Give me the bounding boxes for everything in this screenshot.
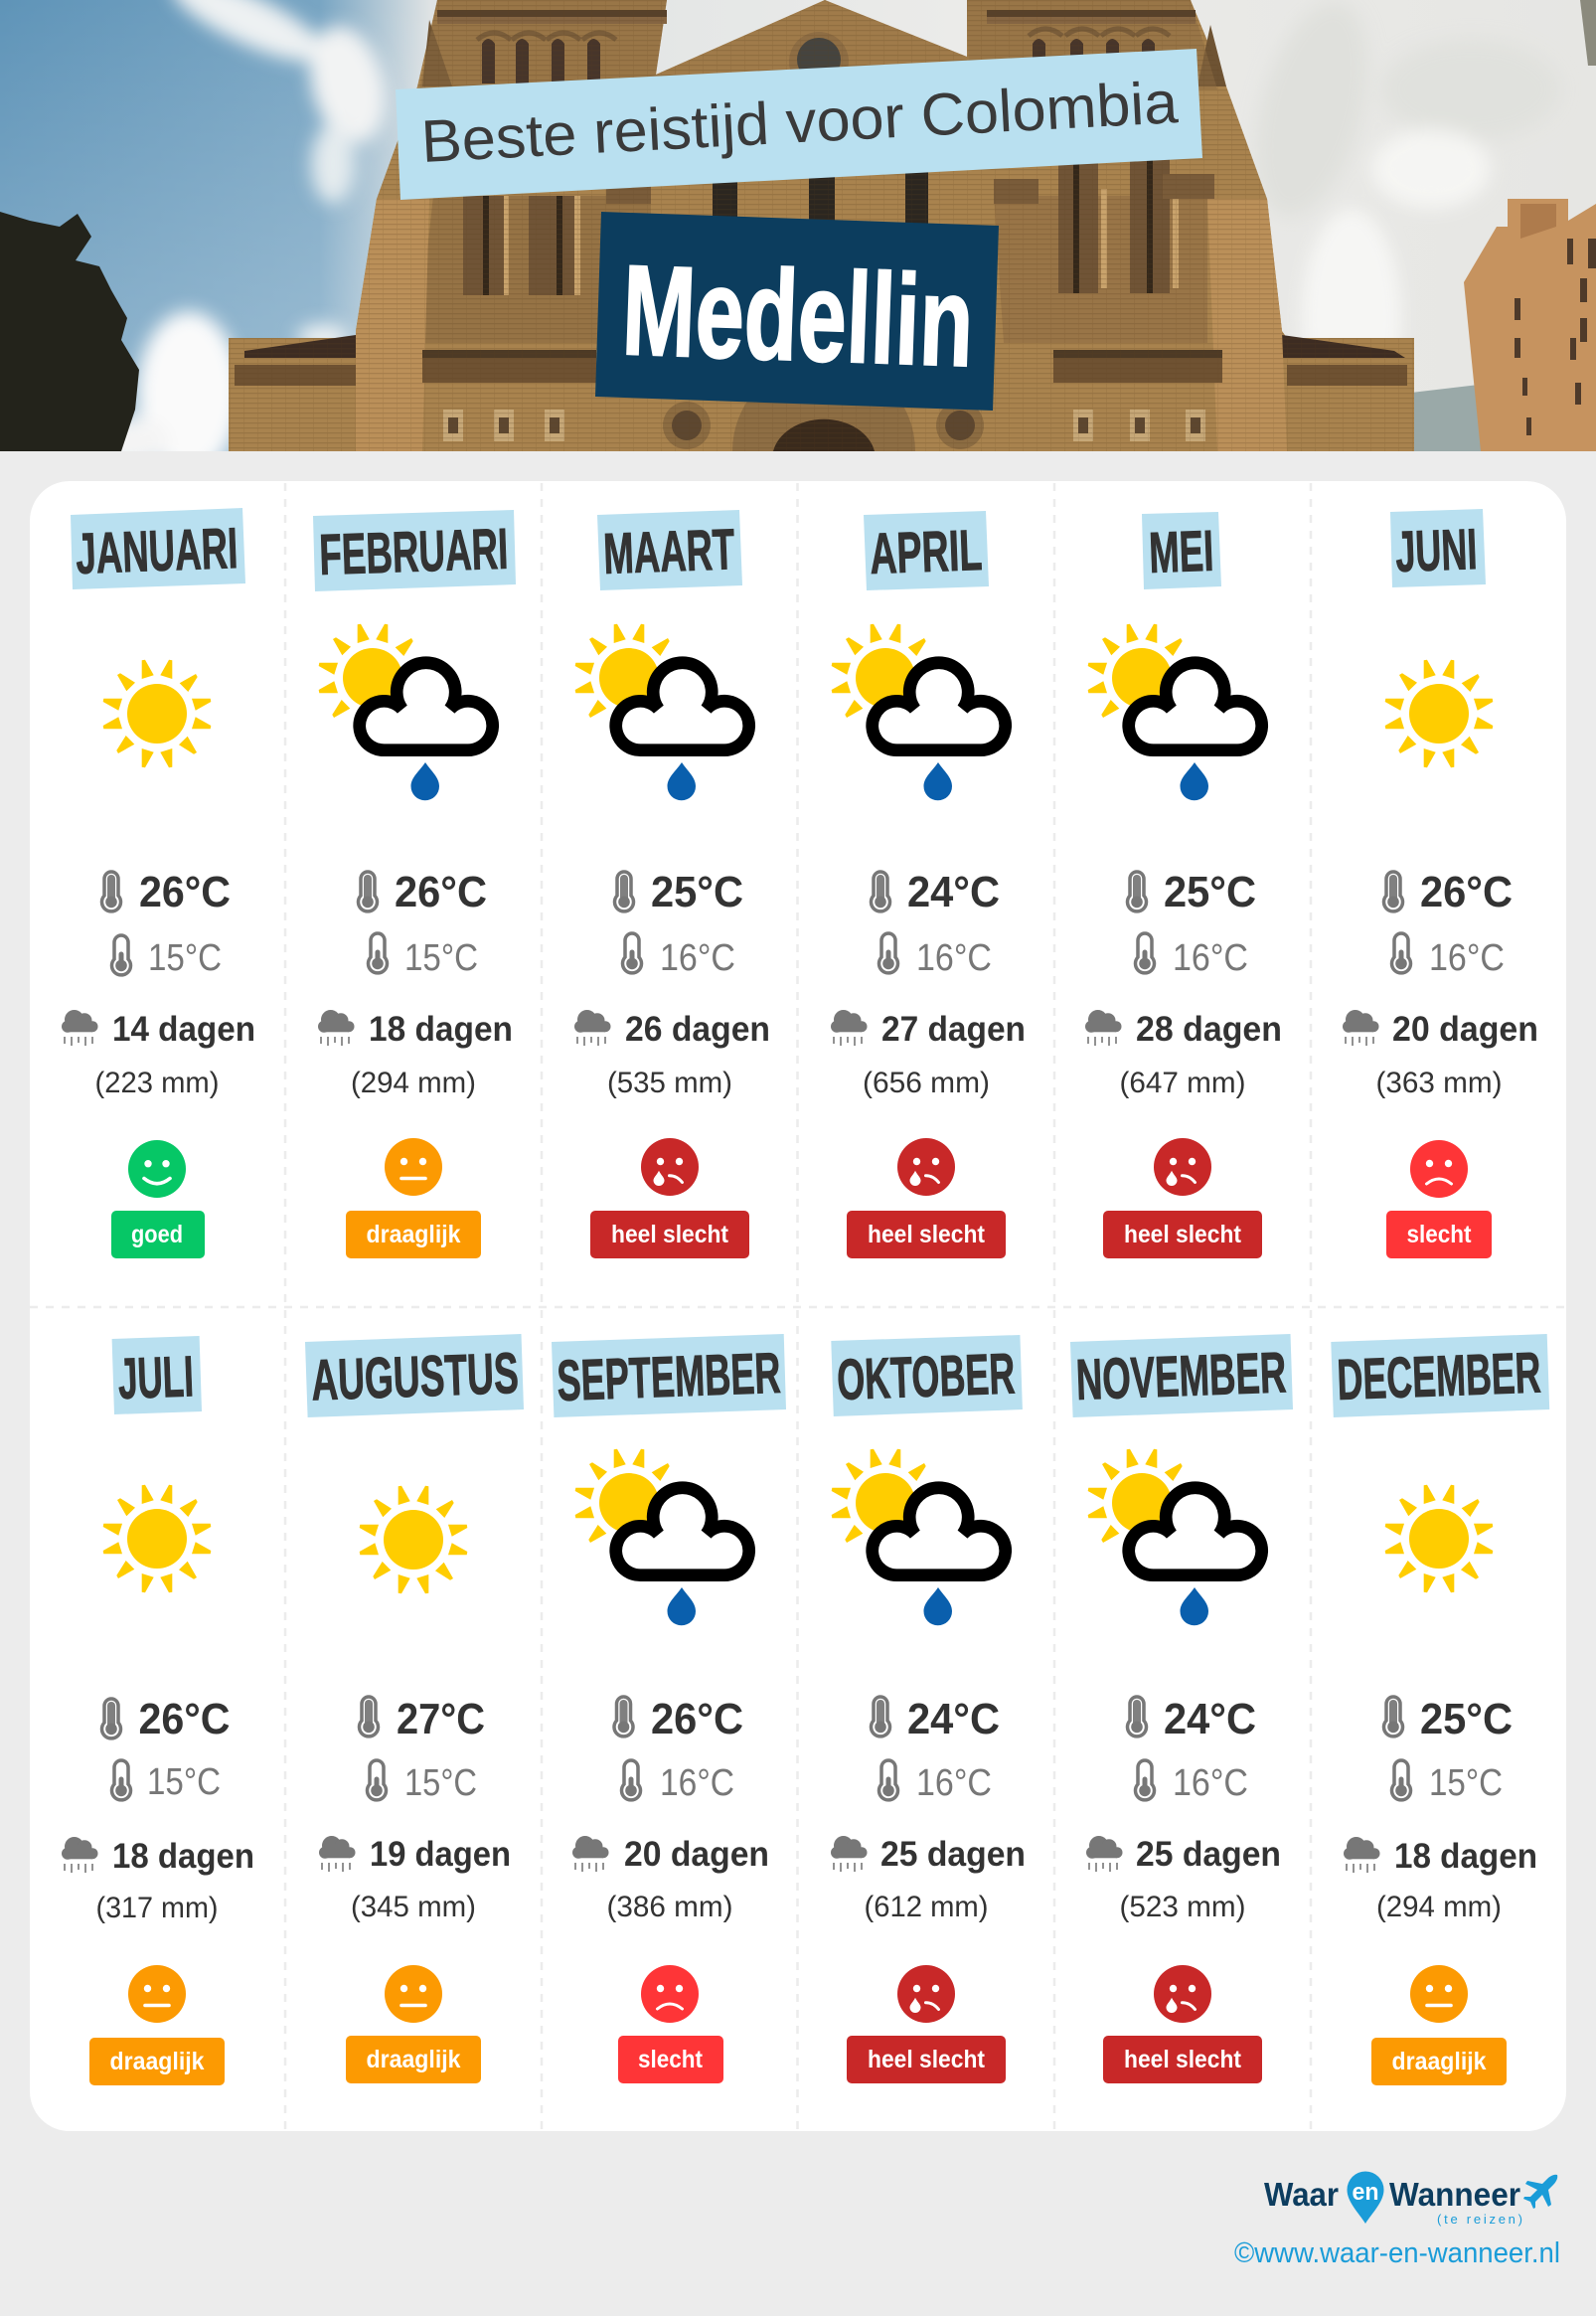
title banner [396, 49, 1202, 200]
icon: rain cloud [62, 1837, 97, 1873]
rain days: 20 dagen [1392, 1010, 1538, 1049]
icon: sun [103, 660, 211, 767]
min temperature: 15°C [404, 937, 478, 979]
icon: thermometer low [1391, 933, 1411, 973]
rating badge: heel slecht [868, 1221, 986, 1248]
min temperature: 16°C [1173, 937, 1248, 979]
rainfall: (386 mm) [606, 1891, 733, 1923]
heading juli [112, 1336, 202, 1414]
title banner: Beste reistijd voor Colombia [419, 69, 1180, 175]
heading januari [71, 508, 245, 589]
max temperature: 26°C [651, 1695, 743, 1743]
heading februari [313, 510, 516, 591]
heading april [864, 511, 989, 590]
icon: crying face [897, 1138, 955, 1196]
max temperature: 24°C [907, 1695, 1000, 1743]
rating badge: heel slecht [611, 1221, 729, 1248]
icon: rain cloud [1086, 1836, 1123, 1872]
icon: rain cloud [831, 1010, 867, 1046]
icon: neutral face [1410, 1965, 1468, 2023]
footer logo: Waar en Wanneer: (te reizen) [1437, 2212, 1522, 2227]
footer logo: Waar en Wanneer [1264, 2171, 1557, 2227]
icon: crying face [641, 1138, 699, 1196]
icon: thermometer high [101, 1699, 121, 1738]
rainfall: (317 mm) [95, 1892, 219, 1924]
rainfall: (363 mm) [1375, 1067, 1503, 1099]
footer logo: Waar en Wanneer: Wanneer [1389, 2176, 1520, 2213]
icon: rain cloud [318, 1010, 354, 1046]
heading juni: JUNI [1394, 517, 1478, 584]
rating badge: heel slecht [1124, 1221, 1242, 1248]
rain days: 18 dagen [1394, 1837, 1537, 1876]
month: september [552, 1334, 786, 2083]
rating badge [618, 2036, 723, 2083]
month: juli [62, 1336, 254, 2085]
rainfall: (523 mm) [1119, 1891, 1246, 1923]
icon: sun with rain cloud [575, 1449, 749, 1625]
month: juni [1343, 509, 1538, 1258]
heading oktober: OKTOBER [836, 1341, 1016, 1412]
brick texture [229, 0, 1414, 451]
icon: thermometer high [1383, 1697, 1403, 1737]
rating badge [1386, 1211, 1492, 1258]
tower windows [482, 39, 1155, 83]
shading [417, 196, 651, 343]
min temperature: 15°C [1429, 1762, 1503, 1804]
rating badge: slecht [1407, 1221, 1472, 1248]
rain days: 25 dagen [1136, 1835, 1281, 1874]
icon: sun [360, 1486, 467, 1593]
rating badge [1371, 2038, 1507, 2085]
rating badge: goed [131, 1221, 183, 1248]
icon: sun with rain cloud [1088, 1449, 1262, 1625]
icon: thermometer low [622, 1760, 640, 1800]
icon: thermometer high [1127, 1697, 1147, 1737]
city banner [595, 212, 999, 411]
rose window [789, 32, 849, 70]
right building [1464, 199, 1596, 451]
max temperature: 26°C [139, 868, 231, 916]
icon: rain cloud [831, 1836, 867, 1872]
icon: thermometer high [360, 1697, 378, 1737]
icon: thermometer high [1127, 872, 1147, 911]
icon: happy face [128, 1140, 186, 1198]
icon: thermometer high [614, 1697, 633, 1737]
month: oktober [831, 1335, 1026, 2083]
icon: thermometer low [1135, 933, 1155, 973]
icon: thermometer low [878, 1760, 898, 1800]
max temperature: 25°C [1164, 868, 1256, 916]
month: februari [313, 510, 516, 1258]
icon: rain cloud [1344, 1837, 1379, 1873]
icon: thermometer low [111, 1760, 131, 1800]
header photo: cathedral of Medellin [0, 0, 1596, 474]
heading april: APRIL [869, 518, 983, 586]
icon: thermometer low [622, 933, 642, 973]
heading juli: JULI [117, 1344, 195, 1411]
lower ornamental band [235, 358, 1407, 386]
min temperature: 15°C [147, 1761, 221, 1803]
icon: thermometer low [1135, 1760, 1155, 1800]
icon: thermometer high [101, 872, 121, 911]
icon: thermometer low [1391, 1760, 1411, 1800]
icon: thermometer high [871, 872, 890, 911]
icon: thermometer high [358, 872, 378, 911]
round windows and door [663, 402, 711, 449]
icon: sun with rain cloud [832, 1449, 1006, 1625]
month: mei [1085, 512, 1282, 1258]
church silhouette [229, 0, 1414, 451]
rainfall: (656 mm) [863, 1067, 990, 1099]
min temperature: 15°C [404, 1762, 477, 1804]
icon: thermometer low [878, 933, 898, 973]
icon: crying face [897, 1965, 955, 2023]
rating badge [346, 2036, 481, 2083]
rating badge [346, 1211, 481, 1258]
rainfall: (223 mm) [95, 1067, 219, 1099]
rating badge [89, 2038, 225, 2085]
icon: sun with rain cloud [319, 624, 493, 800]
rain days: 26 dagen [625, 1010, 770, 1049]
min temperature: 16°C [1173, 1762, 1248, 1804]
month: maart [574, 510, 770, 1258]
rating badge: draaglijk [109, 2048, 205, 2075]
icon: sun [1385, 660, 1493, 767]
upper tower shading [419, 0, 667, 87]
central recesses [713, 172, 928, 224]
rain days: 19 dagen [370, 1835, 511, 1874]
icon: sun [103, 1485, 211, 1592]
icon: sad face [1410, 1140, 1468, 1198]
rating badge: draaglijk [366, 1221, 461, 1248]
rain days: 28 dagen [1136, 1010, 1282, 1049]
icon: thermometer high [1383, 872, 1403, 911]
min temperature: 16°C [1429, 937, 1505, 979]
footer logo: Waar en Wanneer: en [1352, 2179, 1379, 2206]
tree [0, 212, 139, 451]
heading februari: FEBRUARI [318, 517, 509, 587]
icon: thermometer high [871, 1697, 890, 1737]
heading november [1070, 1334, 1293, 1417]
icon: neutral face [385, 1138, 442, 1196]
rain days: 25 dagen [880, 1835, 1026, 1874]
rain days: 18 dagen [369, 1010, 513, 1049]
icon: crying face [1154, 1965, 1211, 2023]
rain days: 14 dagen [112, 1010, 255, 1049]
min temperature: 16°C [660, 1762, 734, 1804]
rating badge: heel slecht [1124, 2046, 1242, 2073]
rainfall: (294 mm) [1376, 1891, 1502, 1923]
rating badge: heel slecht [868, 2046, 986, 2073]
side roofs [244, 335, 356, 358]
icon: thermometer low [368, 1760, 386, 1800]
rating badge [590, 1211, 749, 1258]
max temperature: 26°C [395, 868, 487, 916]
icon: rain cloud [574, 1010, 610, 1046]
calendar panel [30, 481, 1566, 2131]
rain days: 18 dagen [112, 1837, 254, 1876]
rating badge: draaglijk [366, 2046, 461, 2073]
max temperature: 24°C [907, 868, 1000, 916]
max temperature: 26°C [139, 1695, 231, 1743]
rainfall: (535 mm) [607, 1067, 732, 1099]
month: januari [62, 508, 255, 1258]
heading mei [1142, 512, 1221, 589]
month: november [1070, 1334, 1293, 2083]
heading november: NOVEMBER [1075, 1340, 1287, 1412]
rating badge [1103, 1211, 1262, 1258]
month: april [831, 511, 1026, 1258]
heading maart: MAART [602, 517, 735, 586]
min temperature: 16°C [660, 937, 735, 979]
min temperature: 15°C [148, 937, 222, 979]
month: december [1331, 1334, 1549, 2085]
icon: rain cloud [572, 1836, 608, 1872]
heading mei: MEI [1148, 519, 1214, 585]
icon: rain cloud [1343, 1010, 1379, 1046]
heading augustus [305, 1334, 524, 1417]
heading oktober [831, 1335, 1023, 1416]
rating badge [847, 1211, 1006, 1258]
icon: sun with rain cloud [832, 624, 1006, 800]
max temperature: 26°C [1420, 868, 1513, 916]
heading september [552, 1334, 786, 1417]
heading augustus: AUGUSTUS [310, 1341, 520, 1412]
max temperature: 27°C [397, 1695, 485, 1743]
icon: sun with rain cloud [1088, 624, 1262, 800]
icon: thermometer low [368, 933, 388, 973]
icon: neutral face [128, 1965, 186, 2023]
footer url: ©www.waar-en-wanneer.nl [1234, 2237, 1560, 2269]
rain days: 27 dagen [881, 1010, 1026, 1049]
min temperature: 16°C [916, 937, 992, 979]
icon: rain cloud [319, 1836, 356, 1872]
heading maart [597, 510, 742, 590]
city banner: Medellin [620, 239, 976, 394]
icon: neutral face [385, 1965, 442, 2023]
icon: sun with rain cloud [575, 624, 749, 800]
icon: sun [1385, 1485, 1493, 1592]
icon: thermometer high [614, 872, 634, 911]
rating badge: draaglijk [1391, 2048, 1487, 2075]
min temperature: 16°C [916, 1762, 992, 1804]
icon: crying face [1154, 1138, 1211, 1196]
rating badge: slecht [638, 2046, 704, 2073]
footer logo: Waar en Wanneer: Waar [1264, 2176, 1339, 2213]
rating badge [111, 1211, 205, 1258]
icon: sad face [641, 1965, 699, 2023]
month: augustus [305, 1334, 524, 2083]
heading januari: JANUARI [75, 516, 239, 586]
rating badge [847, 2036, 1006, 2083]
rainfall: (647 mm) [1119, 1067, 1246, 1099]
pinnacles [422, 20, 1226, 86]
heading september: SEPTEMBER [556, 1341, 782, 1413]
icon: thermometer low [111, 935, 131, 975]
icon: rain cloud [62, 1010, 97, 1046]
heading juni [1390, 509, 1486, 587]
max temperature: 25°C [1420, 1695, 1513, 1743]
rainfall: (345 mm) [351, 1891, 476, 1923]
rating badge [1103, 2036, 1262, 2083]
rain days: 20 dagen [624, 1835, 769, 1874]
icon: rain cloud [1085, 1010, 1121, 1046]
rainfall: (612 mm) [865, 1891, 988, 1923]
max temperature: 25°C [651, 868, 743, 916]
max temperature: 24°C [1164, 1695, 1256, 1743]
rainfall: (294 mm) [351, 1067, 476, 1099]
